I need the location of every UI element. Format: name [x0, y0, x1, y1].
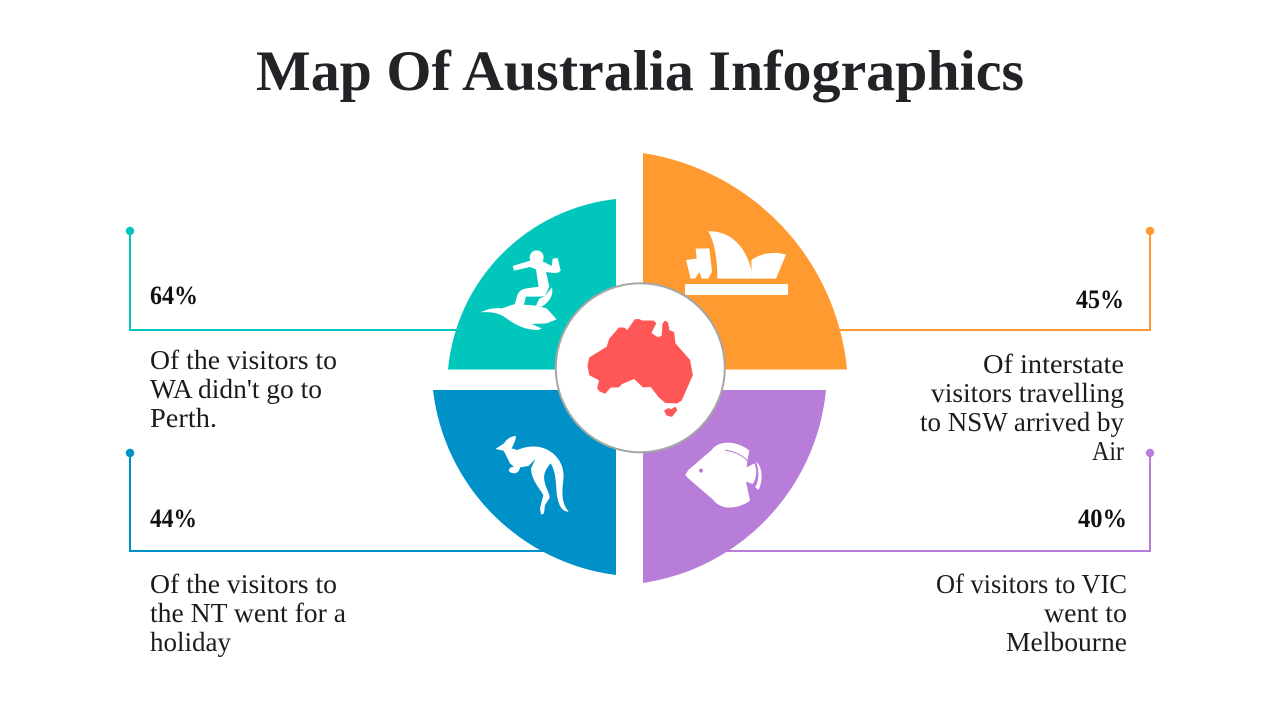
icon: sydney opera house [685, 231, 788, 295]
title: Map Of Australia Infographics [256, 40, 1024, 103]
text block: 44% NT visitors [150, 504, 346, 657]
text block: 40% VIC visitors: Melbourne [1006, 627, 1127, 657]
text block: 45% NSW visitors: Air [1092, 436, 1124, 466]
text block: 64% WA visitors: Perth. [150, 403, 217, 433]
text block: 64% WA visitors: Of the visitors to [150, 345, 337, 375]
connector: blue callout line [127, 450, 545, 551]
text block: 45% NSW visitors [920, 285, 1124, 466]
connector: purple callout line [724, 450, 1153, 551]
text block: 64% WA visitors: WA didn't go to [150, 374, 322, 404]
connector: orange callout line [836, 228, 1153, 330]
text block: 64% WA visitors [150, 281, 337, 433]
text block: 44% NT visitors: Of the visitors to [150, 569, 337, 599]
icon: kangaroo [495, 436, 569, 515]
icon: map of Australia [588, 320, 692, 416]
text block: 64% WA visitors: 64% [150, 281, 198, 310]
panel: purple quarter segment [643, 390, 826, 583]
text block: 45% NSW visitors: to NSW arrived by [920, 407, 1124, 437]
text block: 40% VIC visitors [936, 504, 1127, 657]
panel: teal quarter segment [448, 199, 616, 370]
connector: teal callout line [127, 228, 460, 330]
text block: 45% NSW visitors: visitors travelling [931, 378, 1124, 408]
text block: 40% VIC visitors: Of visitors to VIC [936, 569, 1127, 599]
icon: tropical fish [685, 443, 762, 508]
panel: blue quarter segment [433, 390, 616, 575]
text block: 44% NT visitors: holiday [150, 627, 231, 657]
panel: centre circle with Australia map [556, 283, 725, 452]
text block: 40% VIC visitors: 40% [1078, 504, 1127, 533]
panel: orange quarter segment [643, 153, 847, 370]
text block: 45% NSW visitors: Of interstate [983, 349, 1124, 379]
text block: 44% NT visitors: the NT went for a [150, 598, 346, 628]
text block: 40% VIC visitors: went to [1044, 598, 1127, 628]
icon: surfer [481, 250, 561, 330]
text block: 45% NSW visitors: 45% [1076, 285, 1124, 314]
text block: 44% NT visitors: 44% [150, 504, 197, 533]
